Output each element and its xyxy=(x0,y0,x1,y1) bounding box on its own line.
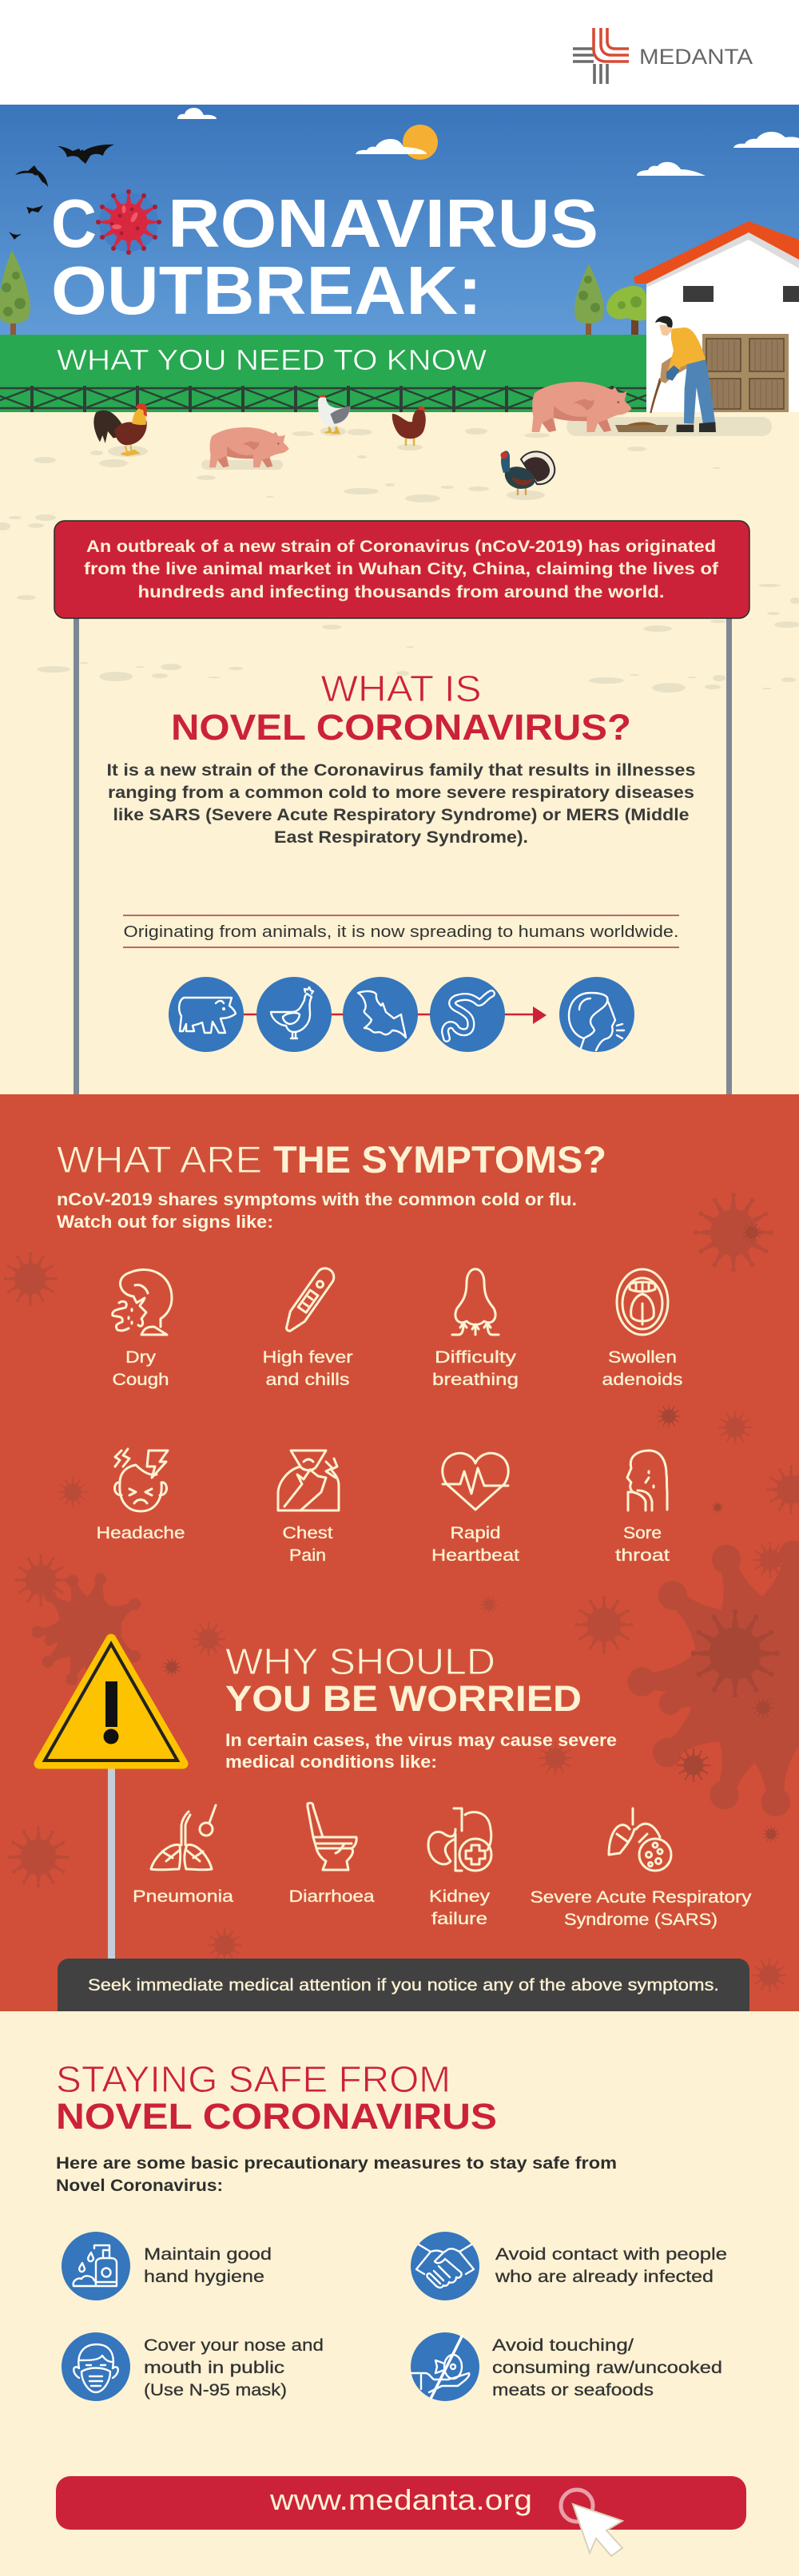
title: Coronavirus Outbreak: OUTBREAK: xyxy=(51,253,482,329)
heading: what are the symptoms: THE SYMPTOMS? xyxy=(273,1138,606,1181)
symptom: chest pain: Chest xyxy=(283,1524,333,1542)
symptoms intro: nCoV-2019 shares symptoms with the common cold or flu. xyxy=(57,1189,577,1209)
symptom: headache: Headache xyxy=(96,1524,185,1542)
condition: pneumonia xyxy=(133,1805,233,1906)
precaution: mask: (Use N-95 mask) xyxy=(144,2381,287,2399)
panel: what is novel coronavirus xyxy=(54,521,749,1094)
title: Coronavirus Outbreak xyxy=(51,186,598,329)
logo: Medanta cross: MEDANTA xyxy=(639,45,753,69)
condition: diarrhoea: Diarrhoea xyxy=(289,1887,375,1906)
symptom: adenoids: Swollen xyxy=(608,1348,677,1367)
symptom: sore throat xyxy=(615,1451,670,1565)
sky xyxy=(0,105,799,335)
precaution: mask: mouth in public xyxy=(144,2359,284,2377)
icon: pig xyxy=(169,977,244,1052)
grass band xyxy=(0,335,646,412)
condition: SARS xyxy=(531,1808,752,1929)
description: like SARS (Severe Acute Respiratory Syndrome) or MERS (Middle xyxy=(113,806,689,824)
trees xyxy=(0,250,646,335)
header: white band with logo xyxy=(0,0,799,105)
symptom: adenoids xyxy=(602,1269,682,1389)
brown hen xyxy=(392,406,426,446)
precaution: mask xyxy=(62,2332,324,2401)
barn door xyxy=(702,334,789,413)
origin line xyxy=(123,915,679,947)
symptoms intro: Watch out for signs like: xyxy=(57,1212,273,1232)
worry intro: In certain cases, the virus may cause severe xyxy=(225,1730,617,1750)
heading xyxy=(171,668,631,748)
condition: SARS: Syndrome (SARS) xyxy=(564,1911,718,1929)
section background: symptoms and warning xyxy=(0,1094,799,2011)
fence xyxy=(0,386,646,412)
pig: big xyxy=(531,382,632,432)
symptoms intro xyxy=(57,1189,577,1232)
precaution intro: Here are some basic precautionary measures to stay safe from xyxy=(56,2154,617,2173)
origin line: Originating from animals, it is now spreading to humans worldwide. xyxy=(123,923,679,941)
symptom: adenoids: adenoids xyxy=(602,1371,682,1389)
worry intro: medical conditions like: xyxy=(225,1752,437,1772)
clouds xyxy=(177,108,799,176)
button: website link xyxy=(56,2476,746,2530)
heading: what are the symptoms: WHAT ARE xyxy=(57,1138,262,1181)
description: East Respiratory Syndrome). xyxy=(274,828,528,847)
description: ranging from a common cold to more severe respiratory diseases xyxy=(108,784,694,802)
rooster xyxy=(93,403,147,455)
heading: why should you be worried xyxy=(225,1641,582,1719)
condition: pneumonia: Pneumonia xyxy=(133,1887,233,1906)
sand spots xyxy=(0,417,799,693)
heading: staying safe xyxy=(56,2058,497,2137)
description xyxy=(107,761,695,847)
condition: SARS: Severe Acute Respiratory xyxy=(531,1888,752,1907)
banner: outbreak summary: An outbreak of a new strain of Coronavirus (nCoV-2019) has originated xyxy=(86,538,716,556)
icon: human head xyxy=(559,977,634,1052)
worry intro xyxy=(225,1730,617,1772)
heading: why should you be worried: YOU BE WORRIED xyxy=(225,1678,582,1719)
symptom: headache xyxy=(96,1449,185,1542)
precaution: avoid contact xyxy=(411,2232,727,2300)
precaution: hand hygiene: Maintain good xyxy=(144,2245,272,2264)
symptom: rapid heartbeat xyxy=(431,1453,519,1565)
condition: diarrhoea xyxy=(289,1803,375,1906)
button: website link: www.medanta.org xyxy=(269,2483,532,2516)
precaution: avoid contact: Avoid contact with people xyxy=(495,2245,727,2264)
symptom: chest pain xyxy=(278,1451,339,1565)
precaution: hand hygiene: hand hygiene xyxy=(144,2268,264,2286)
symptom: fever: High fever xyxy=(262,1348,353,1367)
banner: outbreak summary: from the live animal market in Wuhan City, China, claiming the lives of xyxy=(84,560,719,578)
symptom: breathing: Difficulty xyxy=(435,1348,517,1367)
condition: kidney failure: Kidney xyxy=(429,1887,491,1906)
pig: small xyxy=(209,427,289,467)
subtitle: WHAT YOU NEED TO KNOW xyxy=(57,343,487,376)
farmhouse xyxy=(634,221,799,413)
symptom: sore throat: throat xyxy=(615,1546,670,1565)
sign posts xyxy=(74,615,732,1094)
sand ground xyxy=(0,412,799,516)
precaution: hand hygiene xyxy=(62,2232,272,2300)
bats xyxy=(9,145,114,240)
hero: farm illustration xyxy=(0,105,799,693)
sun xyxy=(356,125,438,160)
symptom: breathing: breathing xyxy=(432,1371,519,1389)
symptom: dry cough: Cough xyxy=(112,1371,169,1389)
precaution intro xyxy=(56,2154,617,2195)
precaution: avoid raw food: consuming raw/uncooked xyxy=(492,2359,722,2377)
farmer with feed tray xyxy=(615,316,716,432)
symptom: sore throat: Sore xyxy=(623,1524,662,1542)
heading: staying safe: NOVEL CORONAVIRUS xyxy=(56,2096,497,2137)
banner: outbreak summary: hundreds and infecting thousands from around the world. xyxy=(137,583,665,601)
symptom: rapid heartbeat: Heartbeat xyxy=(431,1546,519,1565)
symptom: fever: and chills xyxy=(265,1371,350,1389)
condition: kidney failure: failure xyxy=(431,1910,487,1928)
symptom: chest pain: Pain xyxy=(289,1546,326,1565)
title: Coronavirus Outbreak: C xyxy=(51,186,97,262)
banner: outbreak summary xyxy=(54,521,749,618)
precaution: avoid contact: who are already infected xyxy=(495,2268,714,2286)
icon: mouse cursor xyxy=(561,2490,622,2556)
icon: virus in title xyxy=(96,189,161,255)
symptom: fever xyxy=(262,1265,353,1389)
icon: snake xyxy=(430,977,505,1052)
white hen xyxy=(318,395,350,434)
heading: why should you be worried: WHY SHOULD xyxy=(225,1641,495,1682)
background viruses xyxy=(3,1193,799,1992)
condition: kidney failure xyxy=(428,1808,491,1928)
precaution: avoid raw food: meats or seafoods xyxy=(492,2381,654,2399)
title: Coronavirus Outbreak: RONAVIRUS xyxy=(168,186,598,262)
callout: seek medical attention xyxy=(58,1959,749,2011)
callout: seek medical attention: Seek immediate medical attention if you notice any of the above symptoms. xyxy=(88,1976,719,1995)
precaution intro: Novel Coronavirus: xyxy=(56,2177,223,2195)
symptom: rapid heartbeat: Rapid xyxy=(451,1524,500,1542)
description: It is a new strain of the Coronavirus family that results in illnesses xyxy=(107,761,695,780)
symptom: breathing xyxy=(432,1269,519,1389)
symptom: dry cough xyxy=(112,1270,172,1389)
turkey xyxy=(500,451,555,495)
precaution: avoid raw food: Avoid touching/ xyxy=(492,2336,634,2355)
title: Coronavirus Outbreak: O xyxy=(101,186,154,262)
heading: staying safe: STAYING SAFE FROM xyxy=(56,2058,451,2100)
logo: Medanta cross xyxy=(573,28,753,84)
icon: warning sign on post xyxy=(39,1639,183,1960)
heading: WHAT IS xyxy=(321,668,481,709)
icon: chicken xyxy=(256,977,332,1052)
precaution: avoid raw food xyxy=(411,2332,722,2401)
icon: bat xyxy=(343,977,418,1052)
precaution: mask: Cover your nose and xyxy=(144,2336,324,2355)
heading: NOVEL CORONAVIRUS? xyxy=(171,707,631,748)
arrow: transmission chain xyxy=(244,1006,547,1024)
symptom: dry cough: Dry xyxy=(125,1348,157,1367)
